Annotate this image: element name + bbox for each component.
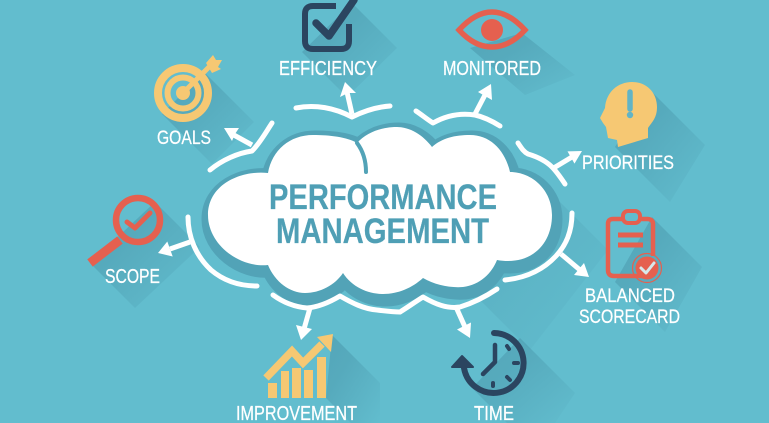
icon: eye <box>459 12 525 47</box>
icon: checkbox <box>305 0 354 49</box>
label: scope: SCOPE <box>105 266 160 288</box>
icon: target <box>158 55 222 118</box>
arrow: goals <box>210 123 272 170</box>
monitored shadow <box>470 33 575 95</box>
label: balanced scorecard <box>579 285 680 328</box>
arrow: monitored <box>416 84 500 126</box>
time shadow <box>472 338 575 423</box>
arrow: priorities <box>518 143 582 184</box>
arrow: time <box>400 289 497 338</box>
goals shadow <box>162 72 254 164</box>
scorecard shadow <box>615 217 702 332</box>
arrow: efficiency <box>296 82 390 117</box>
central cloud <box>208 127 554 298</box>
improvement shadow <box>326 335 380 423</box>
icon: magnifier <box>90 198 160 263</box>
icon: head with exclamation <box>600 82 657 147</box>
label: balanced scorecard: SCORECARD <box>579 306 680 328</box>
title: performance management: MANAGEMENT <box>276 212 489 251</box>
title: performance management <box>269 178 497 251</box>
scope shadow <box>90 202 200 308</box>
icon: clock <box>452 333 524 393</box>
label: balanced scorecard: BALANCED <box>585 285 675 307</box>
arrow: improvement <box>273 295 400 340</box>
efficiency shadow <box>302 3 397 97</box>
arrow: balanced scorecard <box>505 213 589 280</box>
arrow: scope <box>158 217 257 286</box>
icon: clipboard <box>608 211 662 282</box>
priorities shadow <box>615 90 705 202</box>
title: performance management: PERFORMANCE <box>269 178 497 217</box>
label: goals: GOALS <box>157 128 211 149</box>
label: monitored: MONITORED <box>443 58 541 80</box>
cloud long shadow <box>470 190 608 350</box>
icon: growth chart <box>266 334 333 398</box>
label: efficiency: EFFICIENCY <box>279 58 377 80</box>
label: priorities: PRIORITIES <box>582 152 674 174</box>
